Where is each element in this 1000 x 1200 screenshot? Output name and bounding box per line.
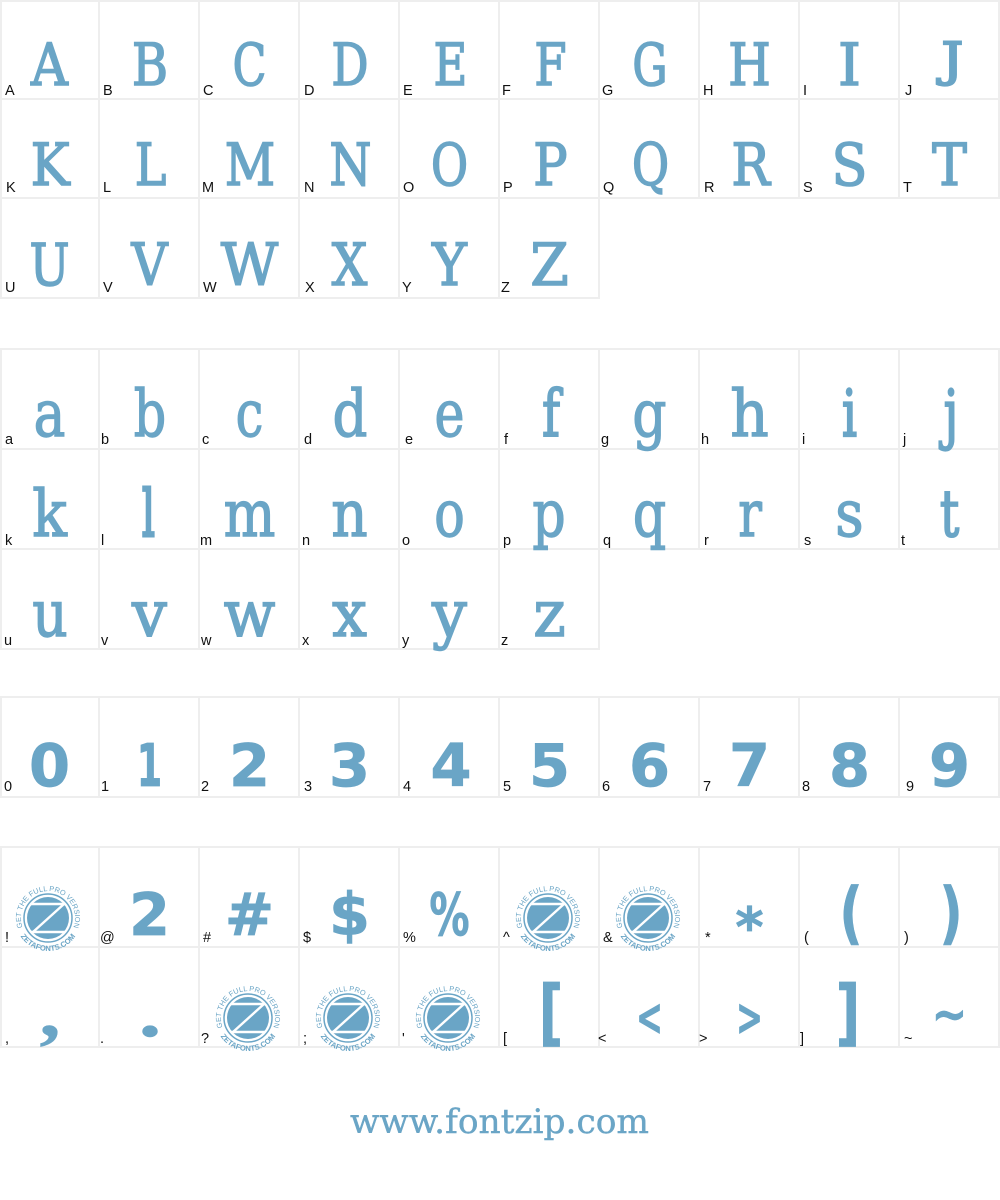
cell: 7: 7 — [729, 731, 770, 800]
cell: S: S — [832, 132, 867, 200]
cell: t — [901, 477, 959, 552]
cell: g — [601, 377, 667, 452]
cell: v: v — [131, 576, 167, 651]
cell: H: H — [703, 83, 713, 99]
cell: percent: % — [403, 930, 416, 946]
cell: tilde: ~ — [932, 985, 967, 1043]
cell: T: T — [932, 132, 967, 200]
cell: question mark with watermark — [201, 986, 280, 1051]
cell: k: k — [32, 477, 68, 552]
icon: watermark badge: GET THE FULL PRO VERSION — [316, 986, 380, 1028]
lowercase glyph grid — [4, 375, 959, 652]
cell: B: B — [103, 83, 113, 99]
icon: watermark badge — [416, 986, 480, 1051]
icon: watermark badge: GET THE FULL PRO VERSION — [516, 886, 580, 928]
cell: right bracket — [800, 971, 860, 1055]
cell: P — [503, 131, 568, 199]
cell: H — [703, 31, 771, 99]
cell: at sign: 2 — [129, 880, 170, 949]
cell: u: u — [4, 633, 12, 649]
cell: H: H — [728, 31, 771, 99]
cell: s: s — [835, 477, 864, 552]
cell: b — [101, 376, 166, 452]
cell: v: v — [101, 633, 109, 649]
icon: watermark badge — [16, 886, 80, 951]
cell: f: f — [504, 432, 509, 448]
cell: A: A — [5, 83, 15, 99]
cell: 2 — [201, 731, 270, 800]
cell: c: c — [236, 375, 263, 452]
cell: e: e — [405, 432, 413, 448]
cell: a: a — [34, 377, 65, 452]
cell: F: F — [534, 32, 567, 99]
cell: q: q — [633, 475, 666, 551]
cell: comma — [5, 974, 60, 1051]
cell: D: D — [304, 83, 314, 99]
cell: y: y — [402, 633, 410, 649]
cell: o: o — [434, 476, 465, 552]
cell: E: E — [403, 83, 413, 99]
cell: u: u — [32, 577, 68, 652]
cell: i: i — [802, 432, 805, 448]
cell: left bracket: [ — [503, 1031, 507, 1047]
cell: R: R — [731, 131, 772, 199]
cell: w — [200, 576, 275, 652]
cell: A: A — [30, 31, 68, 99]
cell: N — [304, 132, 372, 199]
cell: 8 — [802, 731, 870, 800]
cell: w: w — [224, 576, 275, 652]
cell: N: N — [329, 132, 372, 199]
cell: less than — [598, 988, 663, 1048]
cell: 7 — [703, 731, 770, 800]
cell: x — [302, 576, 367, 651]
cell: O: O — [403, 180, 414, 196]
cell: period — [100, 974, 161, 1052]
cell: 3: 3 — [329, 731, 370, 800]
cell: tilde: ~ — [904, 1031, 912, 1047]
cell: m: m — [224, 476, 275, 552]
cell: question mark with watermark: ? — [201, 1031, 209, 1047]
cell: x: x — [302, 633, 310, 649]
cell: W: W — [203, 280, 217, 296]
cell: M: M — [202, 180, 214, 196]
cell: z: z — [501, 633, 508, 649]
cell: 0: 0 — [29, 731, 70, 800]
cell: o — [402, 476, 465, 552]
cell: 7: 7 — [703, 779, 711, 795]
cell: c — [202, 375, 263, 452]
cell: q: q — [603, 533, 611, 549]
cell: E: E — [434, 32, 467, 99]
cell: Z — [501, 232, 569, 299]
cell: V — [103, 231, 168, 299]
cell: o: o — [402, 533, 410, 549]
cell: asterisk: * — [705, 930, 711, 946]
cell: f — [504, 377, 563, 452]
cell: right bracket: ] — [836, 971, 860, 1055]
icon: watermark badge — [216, 986, 280, 1051]
cell: C: C — [233, 32, 266, 100]
cell: greater than — [699, 988, 763, 1048]
cell: S — [803, 132, 867, 200]
cell: 5: 5 — [503, 779, 511, 795]
cell: n: n — [331, 476, 368, 552]
cell: 1: 1 — [101, 779, 109, 795]
cell: comma: , — [5, 1031, 9, 1047]
cell: apostrophe with watermark: ' — [402, 1031, 405, 1047]
cell: E — [403, 32, 467, 99]
cell: L — [103, 131, 166, 199]
cell: right parenthesis: ) — [939, 874, 963, 953]
cell: X — [305, 231, 368, 299]
cell: j: j — [939, 376, 958, 452]
cell: I: I — [838, 31, 861, 99]
cell: Z: Z — [530, 232, 569, 299]
cell: left parenthesis — [804, 874, 863, 953]
cell: K: K — [31, 132, 71, 200]
cell: caret with watermark — [503, 886, 580, 951]
cell: semicolon with watermark: ; — [303, 1031, 307, 1047]
cell: b: b — [134, 376, 166, 452]
cell: 6: 6 — [602, 779, 610, 795]
cell: right parenthesis — [904, 874, 963, 953]
cell: m: m — [200, 533, 212, 549]
cell: u — [4, 577, 68, 652]
cell: Y: Y — [402, 280, 412, 296]
icon: watermark badge: ZETAFONTS.COM — [220, 1033, 276, 1051]
cell: T — [903, 132, 967, 200]
cell: U: U — [29, 231, 70, 299]
cell: p: p — [532, 475, 566, 551]
cell: asterisk — [705, 896, 764, 959]
cell: 6: 6 — [629, 731, 670, 800]
cell: caret with watermark: ^ — [503, 930, 510, 946]
cell: tilde — [904, 985, 967, 1047]
cell: 4 — [403, 731, 472, 800]
cell: hash: # — [225, 880, 274, 949]
cell: Q — [603, 133, 669, 199]
cell: J — [905, 32, 963, 99]
icon: watermark badge: ZETAFONTS.COM — [320, 1033, 376, 1051]
cell: 3: 3 — [304, 779, 312, 795]
cell: ampersand with watermark: & — [603, 930, 613, 946]
cell: g: g — [632, 377, 667, 452]
cell: l: l — [142, 476, 155, 552]
cell: F — [502, 32, 567, 99]
cell: i: i — [842, 376, 857, 452]
cell: 3 — [304, 731, 370, 800]
cell: r: r — [704, 533, 709, 549]
cell: 2: 2 — [201, 779, 209, 795]
cell: at sign: @ — [100, 930, 115, 946]
cell: 5: 5 — [529, 731, 570, 800]
cell: I — [803, 31, 861, 99]
cell: B: B — [132, 31, 168, 99]
cell: 1 — [101, 731, 162, 800]
icon: watermark badge: GET THE FULL PRO VERSION — [216, 986, 280, 1028]
cell: D: D — [331, 32, 369, 99]
cell: a: a — [5, 432, 14, 448]
cell: J: J — [905, 83, 912, 99]
cell: hash — [203, 880, 274, 949]
cell: hash: # — [203, 930, 211, 946]
cell: Q: Q — [603, 180, 614, 196]
cell: 4: 4 — [430, 731, 472, 800]
cell: ampersand with watermark — [603, 886, 680, 951]
cell: at sign — [100, 880, 170, 949]
cell: h: h — [730, 376, 769, 452]
cell: l: l — [101, 533, 104, 549]
icon: watermark badge — [316, 986, 380, 1051]
cell: L: L — [103, 180, 111, 196]
icon: watermark badge: GET THE FULL PRO VERSION — [616, 886, 680, 928]
icon: watermark badge: ZETAFONTS.COM — [620, 933, 676, 951]
cell: exclamation mark with watermark — [5, 886, 80, 951]
digit glyph grid — [4, 731, 970, 800]
cell: O — [403, 133, 468, 199]
cell: g: g — [601, 432, 609, 448]
cell: O: O — [431, 133, 468, 199]
cell: period: . — [139, 974, 161, 1052]
icon: watermark badge: GET THE FULL PRO VERSION — [16, 886, 80, 928]
icon: watermark badge: ZETAFONTS.COM — [420, 1033, 476, 1051]
cell: apostrophe with watermark — [402, 986, 480, 1051]
cell: W: W — [221, 232, 279, 299]
cell: y: y — [431, 576, 467, 651]
cell: w: w — [200, 633, 212, 649]
icon: watermark badge: GET THE FULL PRO VERSION — [416, 986, 480, 1028]
cell: 0: 0 — [4, 779, 12, 795]
cell: Y — [402, 232, 467, 300]
cell: 1: 1 — [137, 731, 162, 800]
cell: a — [5, 377, 65, 452]
cell: z — [501, 576, 566, 651]
symbol glyph grid — [5, 874, 967, 1055]
cell: greater than: > — [736, 988, 763, 1048]
cell: dollar: $ — [303, 930, 311, 946]
cell: comma: , — [40, 974, 60, 1051]
cell: j: j — [902, 432, 906, 448]
cell: right bracket: ] — [800, 1031, 804, 1047]
cell: V: V — [131, 231, 168, 299]
cell: X: X — [305, 280, 315, 296]
cell: n: n — [302, 533, 310, 549]
cell: 9: 9 — [929, 731, 970, 800]
cell: R — [704, 131, 772, 199]
cell: Q: Q — [632, 133, 669, 199]
cell: j — [902, 376, 958, 452]
cell: 8: 8 — [802, 779, 810, 795]
cell: 8: 8 — [829, 731, 870, 800]
cell: X: X — [332, 231, 368, 299]
cell: left bracket: [ — [539, 971, 563, 1055]
icon: watermark badge: ZETAFONTS.COM — [520, 933, 576, 951]
cell: percent — [403, 880, 470, 949]
cell: left parenthesis: ( — [839, 874, 863, 953]
icon: watermark badge: ZETAFONTS.COM — [20, 933, 76, 951]
cell: d — [304, 376, 367, 452]
cell: L: L — [135, 131, 166, 199]
cell: F: F — [502, 83, 511, 99]
cell: e: e — [434, 376, 465, 452]
cell: t: t — [940, 477, 959, 552]
cell: 4: 4 — [403, 779, 411, 795]
cell: k — [5, 477, 68, 552]
cell: s — [804, 477, 864, 552]
cell: G: G — [602, 83, 613, 99]
cell: m — [200, 476, 275, 552]
cell: less than: < — [598, 1031, 606, 1047]
cell: Y: Y — [431, 232, 467, 300]
icon: watermark badge — [616, 886, 680, 951]
cell: P: P — [503, 180, 513, 196]
cell: right parenthesis: ) — [904, 930, 909, 946]
footer website link: www.fontzip.com — [350, 1102, 649, 1142]
cell: k: k — [5, 533, 13, 549]
cell: 9 — [906, 731, 970, 800]
cell: 5 — [503, 731, 570, 800]
cell: J: J — [936, 32, 963, 87]
cell: p: p — [503, 533, 511, 549]
cell: U: U — [5, 280, 15, 296]
cell: p — [503, 475, 566, 551]
cell: M: M — [225, 131, 275, 199]
cell: t: t — [901, 533, 905, 549]
cell: M — [202, 131, 275, 199]
cell: y — [402, 576, 467, 651]
cell: z: z — [533, 576, 566, 651]
cell: Z: Z — [501, 280, 510, 296]
cell: G — [602, 32, 668, 100]
icon: watermark badge — [516, 886, 580, 951]
cell: K: K — [6, 180, 16, 196]
cell: 6 — [602, 731, 670, 800]
cell: h — [701, 376, 769, 452]
cell: U — [5, 231, 70, 299]
cell: q — [603, 475, 666, 551]
cell: 9: 9 — [906, 779, 914, 795]
cell: left bracket — [503, 971, 563, 1055]
cell: A — [5, 31, 68, 99]
cell: l — [101, 476, 155, 552]
cell: R: R — [704, 180, 714, 196]
cell: 0 — [4, 731, 70, 800]
cell: asterisk: * — [735, 896, 764, 959]
cell: I: I — [803, 83, 807, 99]
cell: h: h — [701, 432, 709, 448]
cell: G: G — [632, 32, 668, 100]
cell: c: c — [202, 432, 209, 448]
cell: P: P — [533, 131, 568, 199]
cell: exclamation mark with watermark: ! — [5, 930, 9, 946]
cell: n — [302, 476, 368, 552]
cell: dollar: $ — [329, 880, 370, 949]
cell: percent: % — [429, 880, 470, 949]
cell: 2: 2 — [229, 731, 270, 800]
cell: less than: < — [636, 988, 663, 1048]
cell: D — [304, 32, 369, 99]
uppercase glyph grid — [5, 31, 967, 300]
cell: C — [203, 32, 266, 100]
cell: left parenthesis: ( — [804, 930, 809, 946]
cell: B — [103, 31, 168, 99]
cell: r — [704, 475, 762, 552]
cell: V: V — [103, 280, 113, 296]
cell: C: C — [203, 83, 213, 99]
cell: r: r — [738, 475, 762, 552]
cell: i — [802, 376, 857, 452]
cell: d: d — [333, 376, 367, 452]
cell: greater than: > — [699, 1031, 707, 1047]
cell: semicolon with watermark — [303, 986, 380, 1051]
cell: v — [101, 576, 167, 651]
cell: x: x — [332, 576, 367, 651]
cell: K — [6, 132, 71, 200]
cell: e — [405, 376, 465, 452]
cell: d: d — [304, 432, 312, 448]
cell: T: T — [903, 180, 912, 196]
cell: S: S — [803, 180, 813, 196]
cell: N: N — [304, 180, 314, 196]
cell: s: s — [804, 533, 811, 549]
cell: dollar — [303, 880, 370, 949]
cell: f: f — [542, 377, 563, 452]
cell: period: . — [100, 1031, 104, 1047]
cell: b: b — [101, 432, 109, 448]
